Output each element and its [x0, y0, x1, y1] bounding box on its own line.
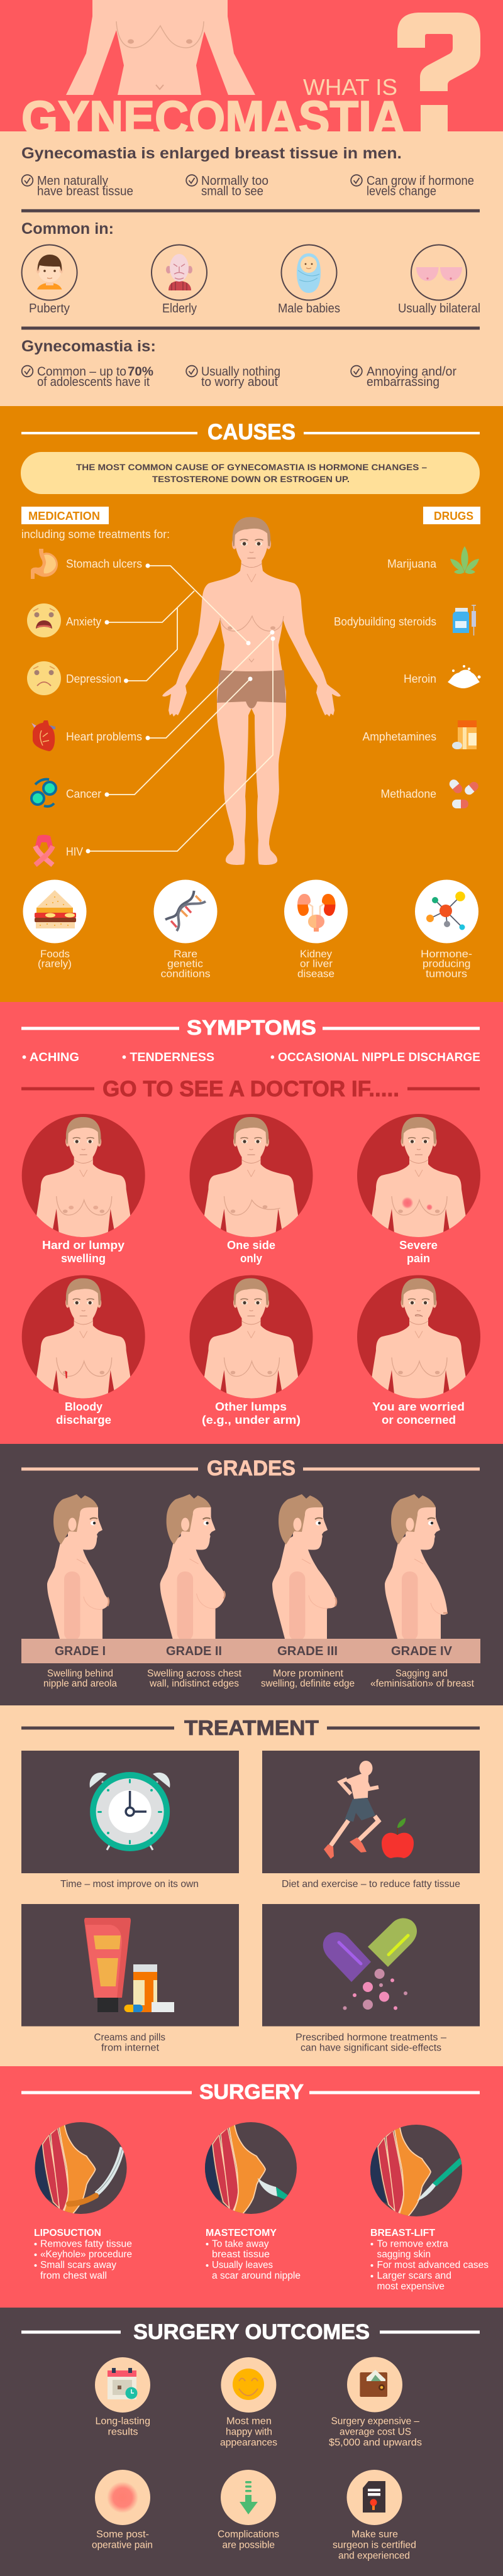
icon: sad face [27, 661, 61, 695]
heading: causes: CAUSES [207, 420, 296, 444]
outcome: pain: Some post- [96, 2529, 149, 2540]
item: other lumps [190, 1275, 313, 1426]
callout: hormone changes: TESTOSTERONE DOWN OR ESTROGEN UP. [152, 474, 350, 484]
heading: gynecomastia is: Gynecomastia is: [21, 338, 156, 355]
outcome: expensive: $5,000 and upwards [329, 2438, 422, 2448]
cause: hormone-producing tumours: producing [423, 958, 470, 970]
item: one side only: One side [227, 1239, 275, 1252]
outcome: expensive: Surgery expensive – [331, 2416, 419, 2427]
text: amphetamines: Amphetamines [362, 730, 436, 743]
grade band: GRADE IV [391, 1644, 453, 1658]
item: severe pain: Severe [399, 1239, 438, 1252]
outcome: expensive: average cost US [340, 2427, 411, 2438]
figure: grade 2 [160, 1494, 225, 1641]
item: male babies: Male babies [278, 302, 340, 316]
heading: surgery [21, 2080, 480, 2103]
caption: grade 4: Sagging and [395, 1668, 448, 1679]
procedure: liposuction: from chest wall [40, 2271, 107, 2281]
heading: grades [21, 1456, 480, 1480]
outcome: happy [220, 2357, 277, 2448]
text: bodybuilding steroids: Bodybuilding steroids [334, 615, 436, 628]
outcome: happy: happy with [226, 2427, 272, 2438]
list: symptoms: • OCCASIONAL NIPPLE DISCHARGE [270, 1051, 480, 1064]
text: heart problems: Heart problems [66, 730, 142, 743]
panel: symptoms [0, 1002, 503, 1444]
heading: causes [21, 420, 480, 444]
heading: what is: WHAT IS [303, 74, 397, 100]
heading: definition: Gynecomastia is enlarged breast tissue in men. [21, 145, 402, 162]
outcome: pain [92, 2470, 153, 2551]
heading: go to see a doctor [21, 1077, 480, 1101]
text: methadone: Methadone [381, 788, 436, 800]
fact: nothing to worry: Usually nothing [201, 365, 280, 378]
connector dots [86, 563, 275, 854]
outcome: happy: Most men [226, 2416, 272, 2427]
figure: grade 4 [385, 1494, 448, 1641]
cause: foods: (rarely) [38, 958, 72, 970]
card: prescribed hormones: Prescribed hormone treatments – [296, 2032, 446, 2043]
caption: grade 1: Swelling behind [47, 1668, 113, 1679]
cause: kidney or liver disease [284, 880, 348, 979]
heading: symptoms: SYMPTOMS [187, 1016, 316, 1039]
list: symptoms: • ACHING [22, 1051, 79, 1064]
text: stomach ulcers: Stomach ulcers [66, 558, 142, 570]
item: bloody discharge [22, 1275, 145, 1426]
panel: causes [0, 406, 503, 1002]
procedure: mastectomy: To take away [212, 2238, 269, 2249]
outcome: complications: are possible [223, 2540, 275, 2551]
cause: rare genetic conditions: genetic [167, 958, 204, 970]
fact: common: 70% [128, 365, 153, 378]
cause: hormone-producing tumours [415, 880, 478, 979]
grade band [21, 1639, 480, 1663]
text: depression: Depression [66, 673, 121, 685]
caption: grade 1: nipple and areola [43, 1678, 117, 1689]
text: cancer: Cancer [66, 788, 101, 800]
icon: powder pile [448, 665, 480, 688]
item: other lumps: Other lumps [215, 1401, 287, 1413]
fact: too small: small to see [201, 185, 263, 199]
callout: hormone changes [21, 452, 480, 494]
illustration: full body [162, 517, 341, 865]
caption: grade 2 [147, 1668, 242, 1689]
icon: amphetamine bottle [452, 720, 477, 749]
procedure: breast-lift: To remove extra [377, 2238, 448, 2249]
outcome: happy: appearances [220, 2438, 277, 2448]
procedure: breast-lift: BREAST-LIFT [370, 2228, 435, 2238]
heading: grades: GRADES [207, 1456, 296, 1480]
item: worried or concerned [357, 1275, 480, 1426]
item: one side only [190, 1114, 313, 1265]
question mark [397, 13, 480, 131]
procedure: liposuction [31, 2122, 132, 2281]
item: hard or lumpy swelling: Hard or lumpy [42, 1239, 124, 1252]
fact: annoying [351, 365, 456, 389]
heading: treatment [21, 1716, 480, 1739]
heading: surgery outcomes: SURGERY OUTCOMES [133, 2320, 370, 2344]
text: including some treatments: including some treatments for: [21, 528, 170, 541]
item: one side only: only [240, 1252, 262, 1265]
icon: anxious face [27, 603, 61, 637]
cause: rare genetic conditions: conditions [161, 967, 211, 979]
fact: annoying: embarrassing [367, 375, 439, 389]
item: other lumps: (e.g., under arm) [202, 1414, 301, 1426]
outcome: certified surgeon [333, 2470, 416, 2562]
icon: pills [448, 778, 480, 808]
heading: gynecomastia: GYNECOMASTIA [21, 91, 406, 146]
panel: definition [0, 131, 503, 406]
label: drugs [423, 507, 480, 524]
figure: grade 1 [47, 1494, 109, 1641]
panel: surgery outcomes [0, 2308, 503, 2576]
fact: nothing to worry: to worry about [201, 375, 278, 389]
icon: steroid bottle and syringe [453, 605, 476, 636]
procedure: breast-lift: most expensive [377, 2281, 445, 2292]
item: bloody discharge: Bloody [65, 1401, 102, 1413]
procedure: breast-lift [366, 2125, 489, 2292]
heading: common in: Common in: [21, 220, 114, 238]
caption: grade 4: «feminisation» of breast [370, 1678, 475, 1689]
outcome: complications [218, 2470, 279, 2551]
item: puberty [22, 245, 77, 316]
card: diet and exercise: Diet and exercise – to reduce fatty tissue [282, 1879, 460, 1890]
cause: foods [23, 880, 87, 970]
outcome: certified surgeon: surgeon is certified [333, 2540, 416, 2551]
procedure: mastectomy: breast tissue [212, 2249, 270, 2260]
item: severe pain [357, 1114, 480, 1265]
medication connector lines [88, 566, 273, 851]
card: time [21, 1751, 239, 1890]
caption: grade 4 [370, 1668, 475, 1689]
card: prescribed hormones [262, 1904, 480, 2053]
procedure: mastectomy: Usually leaves [212, 2260, 273, 2271]
icon: heart [31, 720, 55, 751]
caption: grade 3: swelling, definite edge [261, 1678, 355, 1689]
item: elderly: Elderly [162, 302, 197, 316]
outcome: long-lasting results: results [108, 2427, 138, 2438]
procedure: breast-lift: For most advanced cases [377, 2260, 489, 2271]
cause: hormone-producing tumours: tumours [426, 967, 467, 979]
cause: kidney or liver disease: or liver [300, 958, 333, 970]
fact: too small [186, 174, 268, 199]
item: male babies [278, 245, 340, 316]
outcome: long-lasting results: Long-lasting [96, 2416, 150, 2427]
fact: nothing to worry [186, 365, 280, 389]
grade band: GRADE I [55, 1644, 106, 1658]
fact: breast tissue: Men naturally [37, 174, 108, 188]
fact: too small: Normally too [201, 174, 268, 188]
list: symptoms: • TENDERNESS [122, 1051, 214, 1064]
item: worried or concerned: You are worried [372, 1401, 465, 1413]
procedure: liposuction: Small scars away [40, 2260, 116, 2271]
cause: kidney or liver disease: Kidney [300, 948, 332, 960]
item: puberty: Puberty [29, 302, 70, 316]
cause: rare genetic conditions: Rare [174, 948, 197, 960]
panel: surgery [0, 2066, 503, 2308]
procedure: liposuction: Removes fatty tissue [40, 2238, 132, 2249]
procedure: liposuction: LIPOSUCTION [34, 2228, 101, 2238]
heading: treatment: TREATMENT [184, 1716, 319, 1739]
item: usually bilateral: Usually bilateral [398, 302, 480, 316]
procedure: mastectomy: a scar around nipple [212, 2271, 301, 2281]
item: hard or lumpy swelling: swelling [61, 1252, 106, 1265]
text: anxiety: Anxiety [66, 615, 101, 628]
caption: grade 2: wall, indistinct edges [149, 1678, 239, 1689]
outcome: long-lasting results [95, 2357, 150, 2438]
heading: symptoms [21, 1016, 480, 1039]
item: elderly [152, 245, 207, 316]
cause: hormone-producing tumours: Hormone- [421, 948, 472, 960]
text: heroin: Heroin [404, 673, 436, 685]
outcome: certified surgeon: Make sure [351, 2529, 398, 2540]
panel: grades [0, 1444, 503, 1705]
fact: breast tissue [22, 174, 133, 199]
text: hiv: HIV [66, 845, 83, 858]
procedure: breast-lift: sagging skin [377, 2249, 431, 2260]
procedure: breast-lift: Larger scars and [377, 2271, 451, 2281]
callout: hormone changes: THE MOST COMMON CAUSE OF GYNECOMASTIA IS HORMONE CHANGES – [76, 462, 427, 472]
panel: treatment [0, 1705, 503, 2066]
label: medication [21, 507, 109, 524]
icon: ribbon [35, 835, 53, 865]
caption: grade 2: Swelling across chest [147, 1668, 242, 1679]
panel: header [0, 0, 503, 146]
card: prescribed hormones: can have significant side-effects [301, 2043, 441, 2053]
item: worried or concerned: or concerned [382, 1414, 456, 1426]
cause: kidney or liver disease: disease [297, 967, 334, 979]
grade band: GRADE II [166, 1644, 222, 1658]
heading: go to see a doctor: GO TO SEE A DOCTOR IF..... [102, 1077, 399, 1101]
caption: grade 3: More prominent [273, 1668, 344, 1679]
fact: common [22, 365, 153, 389]
caption: grade 3 [261, 1668, 355, 1689]
fact: common: of adolescents have it [37, 375, 150, 389]
card: diet and exercise [262, 1751, 480, 1890]
item: usually bilateral [398, 245, 480, 316]
list: symptoms [22, 1051, 480, 1064]
heading: surgery: SURGERY [199, 2080, 304, 2103]
card: time: Time – most improve on its own [60, 1879, 199, 1890]
item: bloody discharge: discharge [56, 1414, 111, 1426]
figure: grade 3 [272, 1494, 337, 1641]
label: drugs: DRUGS [434, 510, 473, 522]
outcome: certified surgeon: and experienced [338, 2551, 410, 2562]
caption: grade 1 [43, 1668, 117, 1689]
item: severe pain: pain [407, 1252, 430, 1265]
grade band: GRADE III [277, 1644, 338, 1658]
icon: stomach [31, 549, 58, 579]
fact: annoying: Annoying and/or [367, 365, 456, 378]
card: creams and pills [21, 1904, 239, 2053]
cause: foods: Foods [40, 948, 70, 960]
text: marijuana: Marijuana [387, 558, 437, 570]
fact: hormone levels [351, 174, 474, 199]
item: hard or lumpy swelling [22, 1114, 145, 1265]
card: creams and pills: Creams and pills [94, 2032, 165, 2043]
outcome: complications: Complications [218, 2529, 279, 2540]
procedure: mastectomy [201, 2122, 301, 2281]
cause: rare genetic conditions [153, 880, 218, 979]
icon: cancer sign [31, 779, 56, 806]
card: creams and pills: from internet [101, 2043, 160, 2053]
illustration: male torso [66, 0, 255, 95]
outcome: pain: operative pain [92, 2540, 153, 2551]
fact: hormone levels: Can grow if hormone [367, 174, 474, 188]
heading: surgery outcomes [21, 2320, 480, 2344]
fact: breast tissue: have breast tissue [37, 185, 133, 199]
fact: hormone levels: levels change [367, 185, 436, 199]
fact: common: Common – up to [37, 365, 126, 378]
label: medication: MEDICATION [28, 510, 100, 522]
procedure: liposuction: «Keyhole» procedure [40, 2249, 132, 2260]
procedure: mastectomy: MASTECTOMY [206, 2228, 277, 2238]
icon: cannabis leaf [450, 546, 479, 574]
outcome: expensive [329, 2357, 422, 2448]
